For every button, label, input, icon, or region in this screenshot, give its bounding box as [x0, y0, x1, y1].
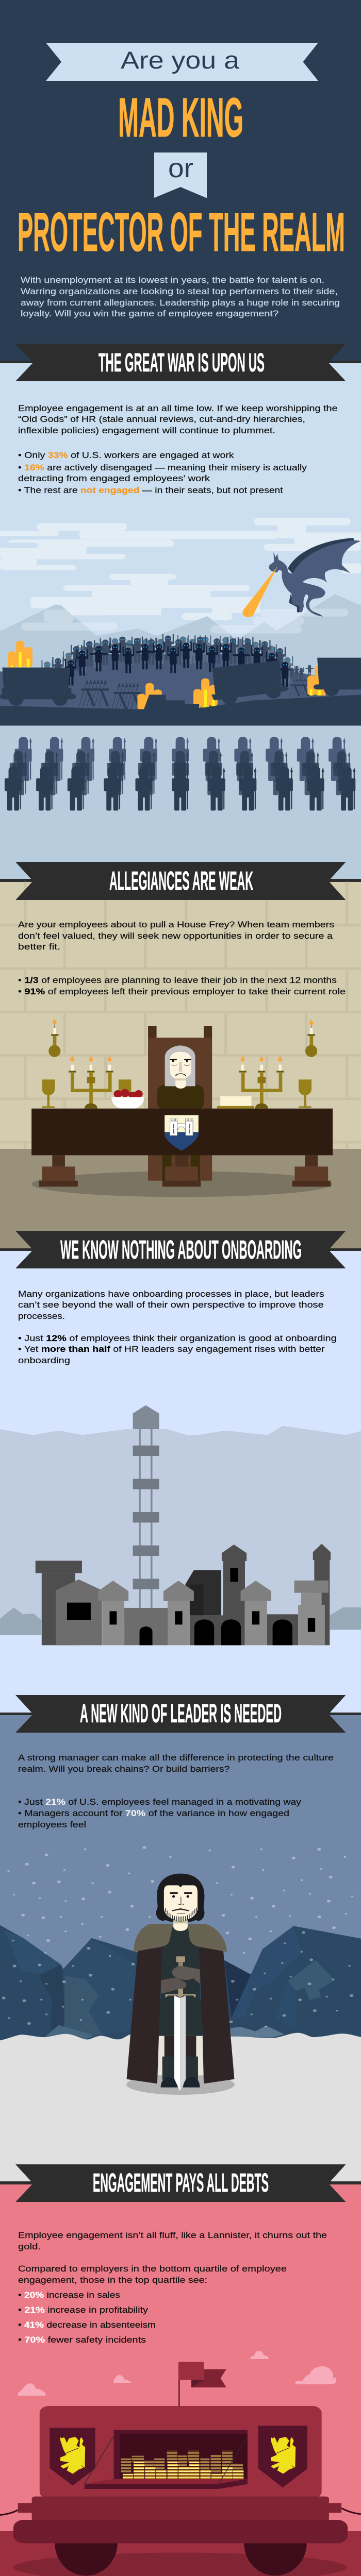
- text: leader paragraph: realm. Will you break chains? Or build barriers?: [18, 1764, 230, 1774]
- text: leader bullets: • Just 21% of U.S. employees feel managed in a motivating way: [18, 1797, 302, 1807]
- ribbon: or: or: [168, 154, 193, 183]
- panel: a new kind of leader is needed: [0, 1695, 361, 2184]
- wagon body: [0, 2406, 361, 2575]
- banner: the great war is upon us: [15, 344, 346, 381]
- fruit bowl: [111, 1089, 144, 1109]
- floor shadow: [31, 1171, 332, 1197]
- watchtower: [133, 1405, 159, 1611]
- banner: a new kind of leader is needed: [15, 1695, 346, 1733]
- illustration: battle scene: [0, 518, 361, 810]
- clouds: [18, 2351, 336, 2396]
- dragon: [269, 538, 361, 617]
- text: onboarding bullets: • Just 12% of employees think their organization is good at onboarding: [18, 1333, 337, 1343]
- text: engagement bullets: • 20% increase in sales: [18, 2290, 120, 2300]
- icy mountains: [0, 1925, 361, 2040]
- intro paragraph: Warring organizations are looking to steal top performers to their side,: [21, 286, 338, 296]
- text: onboarding bullets: onboarding: [18, 1355, 70, 1365]
- text: great war paragraph: Employee engagement is at an all time low. If we keep worshipping the: [18, 403, 337, 413]
- text: engagement bullets: [18, 2290, 156, 2345]
- snowfield: [0, 2033, 361, 2184]
- mountains: [0, 594, 361, 725]
- text: engagement paragraph: Compared to employers in the bottom quartile of employee: [18, 2264, 287, 2274]
- army of the dead: [41, 634, 314, 687]
- fires: [8, 640, 326, 710]
- text: leader paragraph: A strong manager can make all the difference in protecting the culture: [18, 1753, 334, 1762]
- shadow: [13, 2553, 347, 2576]
- falling snow: [4, 1848, 352, 2026]
- text: great war bullets: • 16% are actively disengaged — meaning their misery is actually: [18, 463, 307, 472]
- flame breath: [242, 566, 277, 617]
- text: onboarding paragraph: Many organizations have onboarding processes in place, but leaders: [18, 1289, 324, 1299]
- ribbon: or: [154, 152, 207, 198]
- ice wall: [0, 1426, 361, 1623]
- ribbon: are you a: [46, 43, 318, 81]
- text: leader paragraph: [18, 1753, 334, 1774]
- candelabras: [71, 1072, 282, 1109]
- text: onboarding bullets: • Yet more than half of HR leaders say engagement rises with better: [18, 1344, 325, 1354]
- table: [31, 1109, 333, 1155]
- soldiers: [5, 737, 355, 810]
- spear barricades: [79, 679, 309, 710]
- text: allegiances paragraph: Are your employees about to pull a House Frey? When team members: [18, 920, 334, 929]
- banner: we know nothing about onboarding: [15, 1231, 346, 1268]
- illustration: the wall and castle: [0, 1405, 361, 1645]
- text: onboarding paragraph: processes.: [18, 1311, 65, 1321]
- text: leader bullets: [18, 1797, 302, 1829]
- panel: we know nothing about onboarding: [0, 1231, 361, 1715]
- panel: title section: [0, 0, 361, 363]
- intro paragraph: away from current allegiances. Leadership plays a huge role in securing: [21, 298, 340, 308]
- text: allegiances bullets: [18, 975, 346, 996]
- text: onboarding bullets: [18, 1333, 337, 1365]
- illustration: clouds and flag: [18, 2351, 336, 2406]
- text: leader bullets: • Managers account for 70% of the variance in how engaged: [18, 1808, 289, 1818]
- treasure chest: [85, 2430, 248, 2489]
- panel: engagement pays all debts: [0, 2164, 361, 2576]
- text: engagement bullets: • 70% fewer safety incidents: [18, 2335, 146, 2345]
- book: [217, 1096, 254, 1109]
- banner: allegiances are weak: [15, 862, 346, 900]
- text: allegiances bullets: • 91% of employees left their previous employer to take their current role: [18, 987, 346, 996]
- crest: [165, 1115, 199, 1150]
- leader figure with sword: [126, 1874, 235, 2095]
- text: great war bullets: [18, 450, 307, 495]
- text: allegiances paragraph: [18, 920, 334, 952]
- text: engagement bullets: • 21% increase in profitability: [18, 2305, 149, 2315]
- panel: allegiances are weak: [0, 862, 361, 1251]
- text: allegiances paragraph: better fit.: [18, 942, 60, 952]
- chair: [148, 1026, 212, 1181]
- intro paragraph: [21, 275, 340, 318]
- text: great war paragraph: [18, 403, 337, 435]
- text: great war bullets: • Only 33% of U.S. workers are engaged at work: [18, 450, 234, 460]
- text: allegiances bullets: • 1/3 of employees are planning to leave their job in the next 12 months: [18, 975, 337, 985]
- ground and battlements: [0, 694, 361, 725]
- hill: [0, 654, 361, 725]
- text: onboarding paragraph: can’t see beyond the wall of their own perspective to improve those: [18, 1300, 324, 1310]
- wall candles and table candles: [48, 1019, 317, 1073]
- intro paragraph: With unemployment at its lowest in years, the battle for talent is on.: [21, 275, 324, 285]
- text: great war paragraph: inflexible policies) engagement will continue to plummet.: [18, 426, 275, 435]
- clouds: [0, 518, 361, 620]
- shields with lions: [50, 2426, 307, 2487]
- text: great war bullets: detracting from engaged employees’ work: [18, 473, 210, 483]
- intro paragraph: loyalty. Will you win the game of employee engagement?: [21, 309, 278, 318]
- goblets: [42, 1079, 311, 1108]
- ribbon: are you a: Are you a: [121, 46, 240, 74]
- text: leader bullets: employees feel: [18, 1820, 86, 1829]
- text: engagement paragraph: gold.: [18, 2242, 41, 2251]
- illustration: high table with lord frey: [31, 1019, 333, 1197]
- banner: engagement pays all debts: [15, 2164, 346, 2202]
- text: engagement paragraph: Employee engagement isn’t all fluff, like a Lannister, it churns out the: [18, 2230, 327, 2240]
- text: allegiances paragraph: don’t feel valued, they will seek new opportunities in order to secure a: [18, 931, 333, 941]
- text: great war bullets: • The rest are not engaged — in their seats, but not present: [18, 485, 283, 495]
- lord frey: [157, 1045, 204, 1181]
- text: engagement paragraph: engagement, those in the top quartile see:: [18, 2275, 207, 2285]
- text: engagement paragraph: [18, 2230, 327, 2285]
- flag: [178, 2362, 226, 2406]
- illustration: northern leader in the snow: [0, 1848, 361, 2184]
- text: onboarding paragraph: [18, 1289, 324, 1321]
- text: engagement bullets: • 41% decrease in absenteeism: [18, 2320, 156, 2330]
- siege wagons: [0, 658, 361, 706]
- illustration: treasure wagon: [0, 2406, 361, 2576]
- distant mountains: [0, 1607, 361, 1635]
- castle: [36, 1544, 331, 1645]
- panel: the great war is upon us: [0, 344, 361, 882]
- text: great war paragraph: “Old Gods” of HR (stale annual reviews, cut-and-dry hierarchies,: [18, 414, 305, 424]
